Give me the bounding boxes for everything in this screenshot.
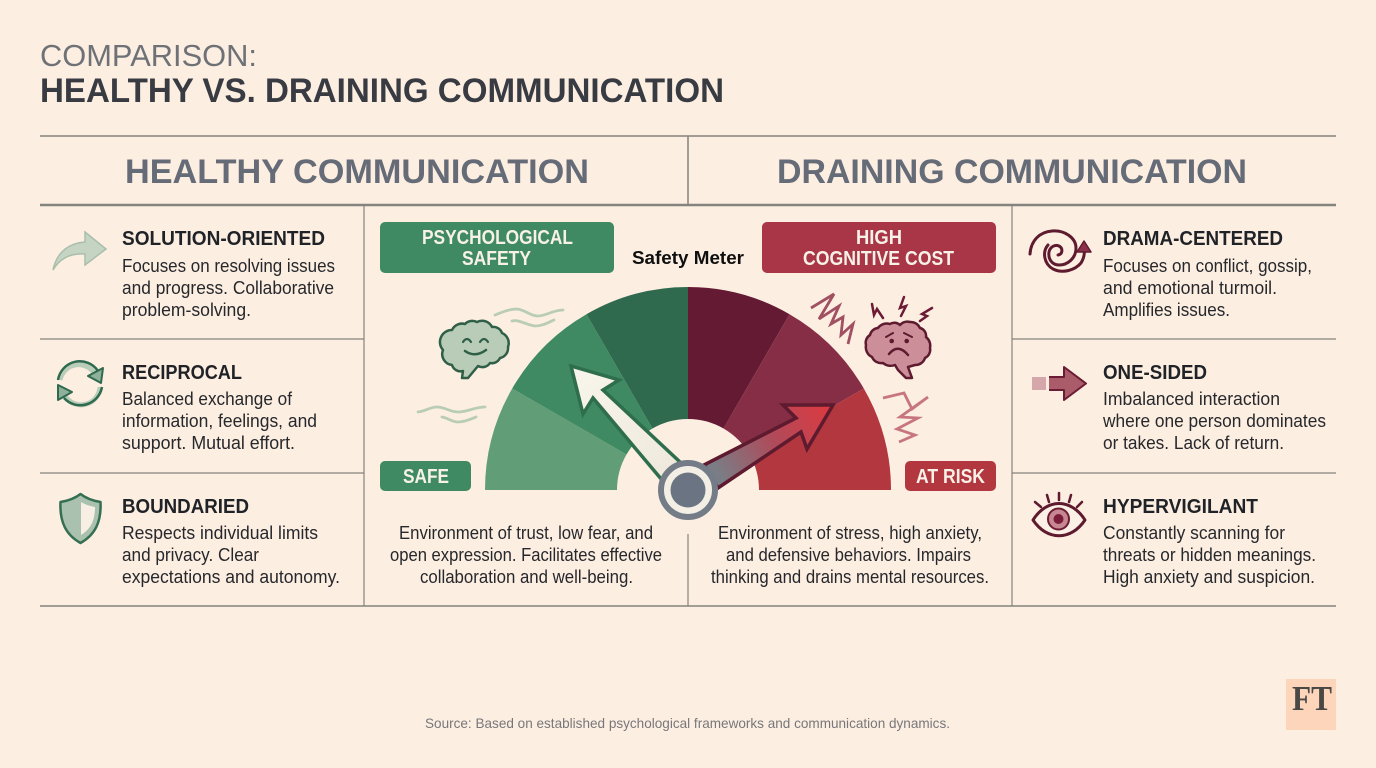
icon: stress bolts [872, 297, 932, 321]
panel: drama-centered [1030, 228, 1312, 320]
text: hypervigilant: threats or hidden meanings. [1103, 545, 1316, 565]
waves: calm lower [418, 407, 485, 422]
icon: one-way arrow [1032, 367, 1086, 400]
icon: cycle arrows [58, 361, 103, 405]
text: boundaried: Respects individual limits [122, 523, 318, 543]
text: reciprocal: Balanced exchange of [122, 389, 293, 409]
text: reciprocal: RECIPROCAL [122, 362, 242, 384]
panel: one-sided [1032, 362, 1326, 453]
badge: psychological safety: SAFETY [462, 248, 532, 270]
text: hypervigilant [1103, 496, 1316, 587]
text: reciprocal: information, feelings, and [122, 411, 317, 431]
logo: FT: FT [1292, 679, 1332, 718]
icon: shield [60, 494, 101, 543]
text: boundaried: and privacy. Clear [122, 545, 259, 565]
text: boundaried: expectations and autonomy. [122, 567, 340, 587]
text: one-sided: ONE-SIDED [1103, 362, 1207, 384]
badge: safe [380, 461, 471, 491]
badge: high cognitive cost: HIGH [856, 227, 902, 249]
text: hypervigilant: Constantly scanning for [1103, 523, 1285, 543]
title: HEALTHY VS. DRAINING COMMUNICATION [40, 72, 724, 110]
text: solution-oriented: and progress. Collaborative [122, 278, 334, 298]
text: one-sided: Imbalanced interaction [1103, 389, 1280, 409]
text: safe description: open expression. Facilitates effective [390, 545, 662, 565]
icon: spiral with arrow [1030, 231, 1091, 271]
table grid lines [40, 136, 1336, 606]
icon: happy brain [440, 321, 509, 378]
waves: calm upper [495, 309, 563, 326]
badge: at risk [905, 461, 996, 491]
text: hypervigilant: HYPERVIGILANT [1103, 496, 1258, 518]
text: one-sided: or takes. Lack of return. [1103, 433, 1284, 453]
text: boundaried: BOUNDARIED [122, 496, 249, 518]
badge: safe: SAFE [403, 466, 449, 488]
text: solution-oriented: problem-solving. [122, 300, 251, 320]
badge: psychological safety [380, 222, 614, 273]
icon: worried brain [866, 322, 930, 378]
text: reciprocal: support. Mutual effort. [122, 433, 295, 453]
logo: FT [1286, 679, 1336, 730]
panel: reciprocal [58, 361, 317, 453]
text: risk description: Environment of stress, high anxiety, [718, 523, 982, 543]
label: safety meter: Safety Meter [632, 248, 744, 268]
zigzag: lower stress [883, 393, 928, 442]
panel: hypervigilant [1033, 493, 1316, 587]
badge: psychological safety: PSYCHOLOGICAL [422, 227, 573, 249]
text: risk description: and defensive behaviors. Impairs [726, 545, 971, 565]
text: solution-oriented [122, 228, 335, 320]
badge: high cognitive cost [762, 222, 996, 273]
gauge hub [661, 463, 715, 517]
text: solution-oriented: Focuses on resolving issues [122, 256, 335, 276]
text: drama-centered: and emotional turmoil. [1103, 278, 1277, 298]
text: risk description: thinking and drains mental resources. [711, 567, 989, 587]
badge: high cognitive cost: COGNITIVE COST [803, 248, 954, 270]
text: boundaried [122, 496, 340, 587]
text: drama-centered: Focuses on conflict, gossip, [1103, 256, 1312, 276]
panel: boundaried [60, 494, 340, 587]
heading: healthy communication: HEALTHY COMMUNICATION [125, 153, 589, 191]
gauge: safety meter [485, 287, 891, 517]
text: safe description [390, 523, 662, 587]
text: safe description: collaboration and well-being. [420, 567, 633, 587]
text: drama-centered [1103, 228, 1312, 320]
badge: at risk: AT RISK [916, 466, 985, 488]
icon: curved arrow [53, 232, 106, 270]
needle: safe direction [571, 366, 680, 480]
text: one-sided: where one person dominates [1102, 411, 1326, 431]
panel: solution-oriented [53, 228, 335, 320]
gauge: red segments [688, 287, 891, 490]
icon: eye [1033, 493, 1085, 536]
text: risk description [711, 523, 989, 587]
text: one-sided [1102, 362, 1326, 453]
text: drama-centered: DRAMA-CENTERED [1103, 228, 1283, 250]
title [40, 38, 724, 110]
needle: risk direction [704, 405, 833, 488]
title: COMPARISON: [40, 38, 257, 73]
text: hypervigilant: High anxiety and suspicion. [1103, 567, 1315, 587]
zigzag: upper stress [811, 294, 853, 344]
text: drama-centered: Amplifies issues. [1103, 300, 1230, 320]
heading: draining communication: DRAINING COMMUNICATION [777, 153, 1247, 191]
text: reciprocal [122, 362, 317, 453]
text: safe description: Environment of trust, low fear, and [399, 523, 653, 543]
source note: Source: Based on established psychological frameworks and communication dynamics. [425, 715, 950, 731]
text: solution-oriented: SOLUTION-ORIENTED [122, 228, 325, 250]
gauge: green segments [485, 287, 688, 490]
